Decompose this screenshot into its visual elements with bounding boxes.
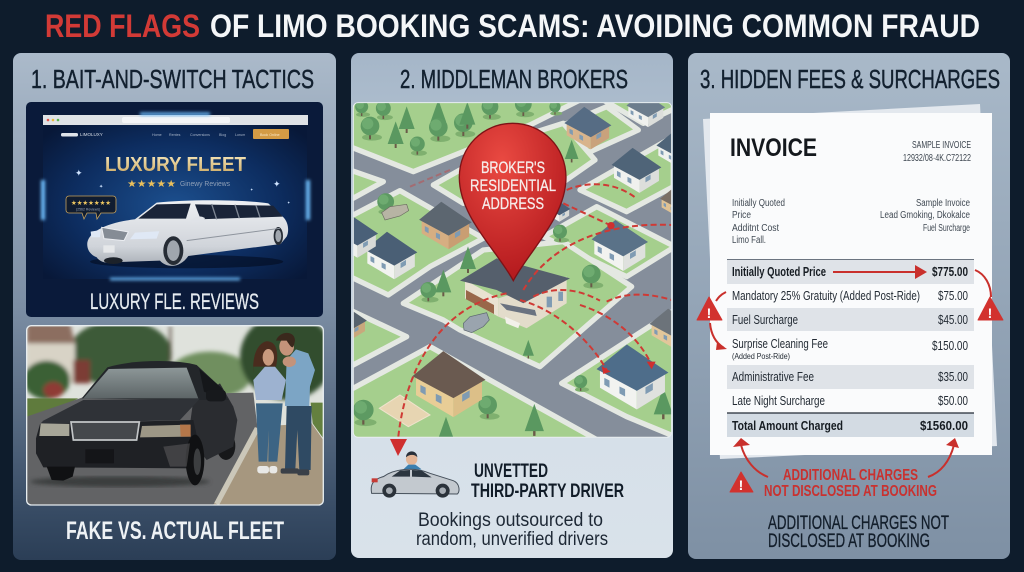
panel 3 caption: ADDITIONAL CHARGES NOT	[768, 513, 949, 534]
invoice reference	[903, 140, 971, 164]
pin label: BROKER'S	[481, 158, 545, 177]
fee table: Surprise Cleaning Fee	[732, 336, 828, 351]
sparkles: ✦	[287, 200, 291, 205]
fee table: $150.00	[932, 338, 968, 353]
review badge: ★★★★★★★	[71, 199, 111, 207]
fee table: $775.00	[932, 264, 968, 279]
pin label	[470, 158, 556, 213]
invoice details left: Price	[732, 210, 751, 221]
red warning text	[764, 467, 937, 500]
panel 3 caption: DISCLOSED AT BOOKING	[768, 531, 930, 552]
star rating	[127, 179, 230, 190]
couple	[253, 333, 315, 475]
red warning text: ADDITIONAL CHARGES	[783, 467, 918, 484]
invoice details left: Limo Fall.	[732, 235, 766, 246]
fee table: Late Night Surcharge	[732, 393, 825, 408]
fee table: Administrative Fee	[732, 369, 814, 384]
invoice details right: Fuel Surcharge	[923, 223, 970, 234]
glow accents	[43, 114, 308, 279]
site navigation: Conversions	[190, 133, 210, 137]
pin label: RESIDENTIAL	[470, 176, 556, 195]
panel 2 caption: random, unverified drivers	[416, 529, 608, 550]
location pin	[459, 123, 566, 281]
fee table: Total Amount Charged	[732, 418, 843, 433]
site navigation: Blog	[219, 133, 226, 137]
fee table: Mandatory 25% Gratuity (Added Post-Ride)	[732, 288, 920, 303]
invoice reference: SAMPLE INVOICE	[912, 140, 971, 151]
invoice details right	[880, 198, 970, 234]
site navigation: Rentes	[169, 133, 181, 137]
warning icons: !	[988, 305, 992, 321]
luxury fleet heading: LUXURY FLEET	[105, 154, 246, 176]
browser bar	[43, 115, 308, 125]
sparkles: ✦	[99, 184, 103, 190]
site navigation: Book Online	[260, 133, 280, 137]
invoice header: INVOICE	[730, 134, 817, 162]
neighborhood map	[352, 102, 672, 438]
sparkles: ✦	[75, 168, 83, 178]
site navigation: Home	[152, 133, 162, 137]
sparkles: ✦	[250, 187, 254, 192]
sparkles	[75, 168, 291, 205]
blurred street background	[27, 326, 323, 404]
driver label: THIRD-PARTY DRIVER	[471, 481, 624, 502]
invoice details left	[732, 198, 785, 246]
trees	[353, 96, 673, 446]
fee table: $75.00	[938, 288, 968, 303]
panel: middleman brokers	[351, 53, 673, 558]
panel: bait-and-switch tactics	[13, 53, 336, 560]
photo: worn black sedan and upset couple	[23, 313, 333, 505]
houses	[328, 92, 695, 417]
mock-up caption: LUXURY FLE. REVIEWS	[90, 289, 259, 314]
icon: driver in car	[371, 451, 459, 498]
fee table	[727, 260, 974, 437]
fee table: Fuel Surcharge	[732, 312, 798, 327]
panel 3 caption	[768, 513, 949, 552]
sparkles: ✦	[273, 179, 281, 189]
panel 2 caption	[416, 510, 608, 550]
red warning text: NOT DISCLOSED AT BOOKING	[764, 483, 937, 500]
panel: hidden fees and surcharges	[688, 53, 1010, 559]
review badge	[66, 196, 116, 219]
fee table: $50.00	[938, 393, 968, 408]
site navigation: Lorum	[235, 133, 245, 137]
website mockup card	[26, 102, 323, 317]
arrow to driver	[390, 439, 407, 456]
site navigation	[61, 129, 289, 139]
fee table: $1560.00	[920, 418, 968, 433]
site navigation: LIMOLUXY	[80, 132, 103, 137]
fee table: Initially Quoted Price	[732, 264, 826, 279]
driver label	[471, 461, 624, 502]
title: RED FLAGS	[45, 8, 200, 44]
invoice details left: Initially Quoted	[732, 198, 785, 209]
star rating: Ginewy Reviews	[180, 181, 230, 188]
white limousine	[87, 200, 288, 268]
star rating: ★★★★★	[127, 179, 176, 190]
invoice reference: 12932/08·4K.C72122	[903, 153, 971, 164]
pin label: ADDRESS	[482, 194, 544, 213]
warning icons: !	[739, 477, 743, 493]
heading: panel 2: 2. MIDDLEMAN BROKERS	[400, 64, 628, 94]
photo caption: FAKE VS. ACTUAL FLEET	[66, 517, 284, 545]
dashed route arrows	[398, 170, 672, 437]
invoice details right: Sample Invoice	[916, 198, 970, 209]
panel 2 caption: Bookings outsourced to	[418, 510, 603, 531]
driver label: UNVETTED	[474, 461, 548, 482]
warning icons	[697, 297, 1003, 493]
red fee arrows	[710, 265, 991, 477]
invoice	[703, 104, 997, 459]
invoice details right: Lead Gmoking, Dkokalce	[880, 210, 970, 221]
fee table: $45.00	[938, 312, 968, 327]
heading: panel 1: 1. BAIT-AND-SWITCH TACTICS	[31, 64, 314, 94]
fee table: $35.00	[938, 369, 968, 384]
sedan	[36, 361, 237, 485]
warning icons: !	[707, 305, 711, 321]
invoice details left: Additnt Cost	[732, 223, 779, 234]
fee table: (Added Post-Ride)	[732, 352, 790, 361]
review badge: (2562 Reviews)	[76, 208, 100, 212]
parked cars	[382, 204, 489, 333]
main broker house	[460, 258, 570, 328]
